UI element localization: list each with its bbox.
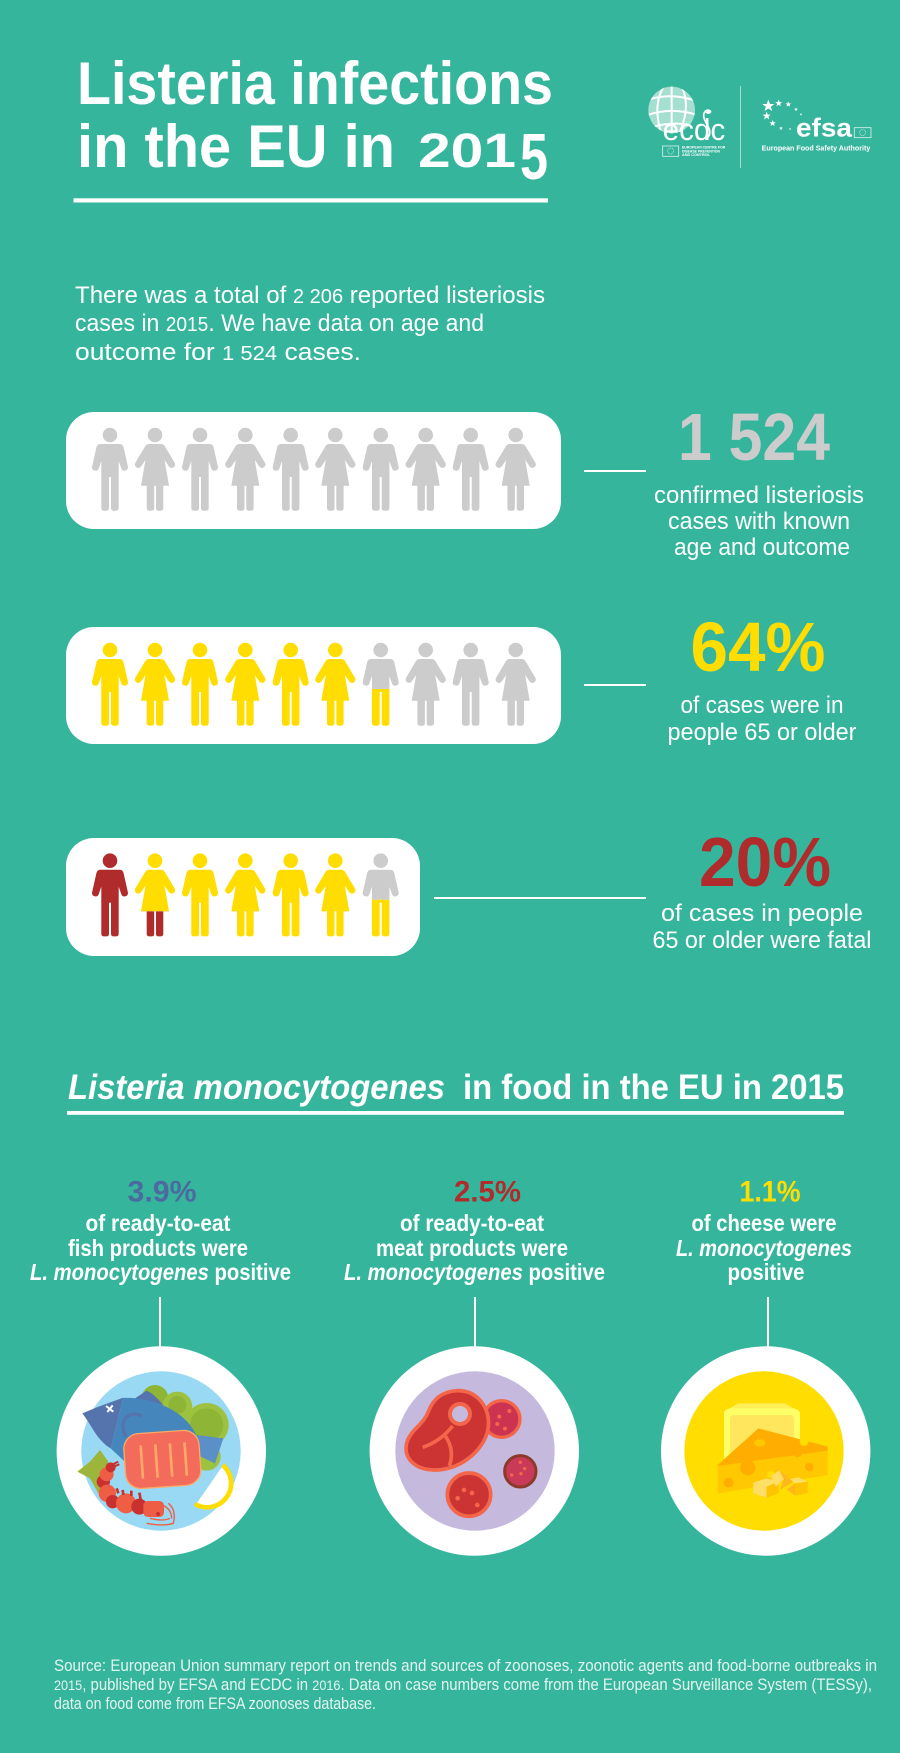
text: cheese	[676, 1176, 852, 1285]
logo: ECDC: ecdc	[663, 113, 725, 147]
text: fish products	[30, 1176, 291, 1285]
stat: 64%: 64%	[690, 608, 826, 686]
salami top	[483, 1401, 520, 1437]
title: Listeria infections	[77, 50, 553, 117]
stat: 1 524 cases: age and outcome	[674, 534, 850, 561]
stat: 20%: 20%	[699, 823, 831, 901]
stat: 64%: of cases were in	[680, 692, 844, 719]
logo: ECDC: AND CONTROL	[682, 153, 711, 157]
text: fish products: of ready-to-eat	[86, 1210, 231, 1236]
logo: EFSA: European Food Safety Authority	[762, 144, 871, 153]
stat: 20%	[652, 823, 872, 954]
panel: all cases pictogram	[66, 412, 561, 529]
stat: 64%: people 65 or older	[668, 719, 856, 746]
logo: EFSA: efsa	[796, 113, 853, 143]
title	[74, 50, 553, 202]
text: cheese: 1.1%	[740, 1176, 800, 1208]
text: fish products: fish products were	[68, 1235, 248, 1261]
text: cheese: L. monocytogenes	[676, 1235, 852, 1261]
intro text: cases in 2015. We have data on age and	[75, 310, 484, 337]
title: 5	[520, 120, 548, 193]
section heading: food: Listeria monocytogenes	[68, 1068, 445, 1107]
source note: data on food come from EFSA zoonoses database.	[54, 1695, 376, 1713]
icon: cheese plate	[661, 1346, 870, 1556]
stat: 1 524 cases: cases with known	[668, 508, 850, 535]
salmon steak	[123, 1429, 202, 1490]
stat: 20%: of cases in people	[661, 900, 863, 927]
cheese block	[724, 1403, 800, 1463]
stat: 1 524 cases: confirmed listeriosis	[654, 482, 864, 509]
logo: ECDC: DISEASE PREVENTION	[682, 149, 720, 153]
icon: meat plate	[370, 1346, 579, 1556]
cheese cubes	[753, 1470, 808, 1498]
title: in the EU in	[77, 113, 395, 180]
title: 201	[418, 125, 516, 178]
fish	[82, 1391, 223, 1463]
stat: 1 524 cases: 1 524	[678, 400, 830, 475]
steak	[406, 1391, 488, 1470]
intro text: outcome for 1 524 cases.	[75, 339, 361, 366]
source note	[54, 1657, 877, 1713]
text: meat products: 2.5%	[454, 1176, 521, 1208]
cheese wedge	[718, 1428, 828, 1493]
salami bottom	[447, 1473, 491, 1516]
stat: 20%: 65 or older were fatal	[652, 927, 872, 954]
shrimp	[97, 1462, 174, 1525]
text: meat products	[344, 1176, 605, 1285]
text: fish products: 3.9%	[128, 1176, 196, 1208]
text: meat products: L. monocytogenes positive	[344, 1259, 605, 1285]
stat: 64%	[668, 608, 856, 746]
logo: EFSA	[762, 100, 871, 153]
intro text: There was a total of 2 206 reported listeriosis	[75, 282, 545, 309]
stat: 1 524 cases	[654, 400, 864, 561]
section heading: food	[67, 1068, 844, 1115]
salami right	[505, 1456, 536, 1487]
text: meat products: of ready-to-eat	[400, 1210, 544, 1236]
salad leaves	[142, 1385, 229, 1471]
section heading: food: in food in the EU in 2015	[463, 1068, 844, 1107]
lemon	[195, 1465, 231, 1507]
logo: ECDC: EUROPEAN CENTRE FOR	[682, 146, 726, 150]
intro text	[75, 282, 545, 366]
panel: fatal cases pictogram	[66, 838, 420, 956]
text: fish products: L. monocytogenes positive	[30, 1259, 291, 1285]
panel: 65 or older pictogram	[66, 627, 561, 744]
basil leaves	[77, 1450, 108, 1493]
logo: ECDC	[647, 85, 726, 157]
text: meat products: meat products were	[376, 1235, 568, 1261]
text: cheese: positive	[728, 1259, 804, 1285]
icon: fish plate	[57, 1346, 266, 1556]
text: cheese: of cheese were	[692, 1210, 836, 1236]
